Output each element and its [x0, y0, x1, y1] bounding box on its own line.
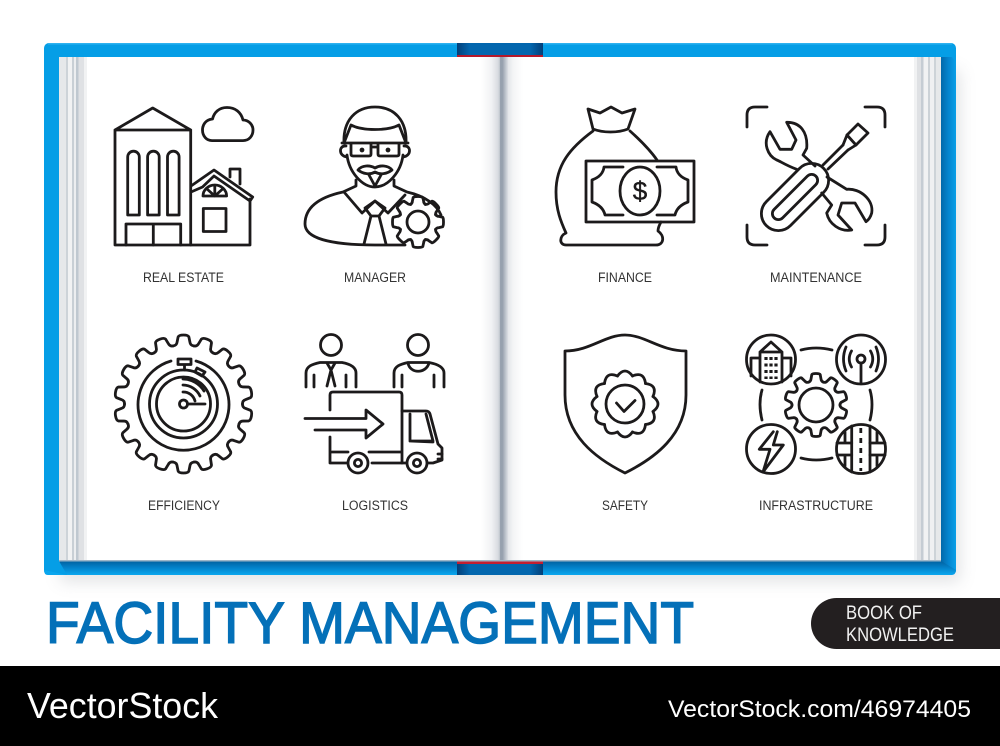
person with tie [306, 334, 356, 387]
dollar sign: $ [633, 176, 648, 206]
stopwatch ring [150, 370, 218, 438]
building circle [746, 335, 796, 384]
icon: efficiency [114, 335, 253, 473]
footer bar [0, 666, 1000, 746]
body [305, 180, 441, 245]
icon: infrastructure [746, 335, 886, 474]
cog outline [114, 335, 253, 473]
banknote [586, 161, 694, 222]
pages [59, 57, 941, 561]
label: safety: SAFETY [602, 498, 648, 513]
antenna circle [836, 335, 886, 384]
wrench lower head [822, 177, 872, 230]
arched window [203, 185, 227, 196]
screwdriver shaft [823, 145, 848, 169]
left page edges [59, 57, 87, 561]
tie [364, 201, 386, 244]
book cover [44, 43, 956, 575]
cloud [202, 108, 253, 141]
gauge arcs [183, 379, 204, 401]
square window [203, 208, 226, 232]
outer ring [138, 361, 229, 450]
icon: maintenance [747, 107, 885, 245]
handle slot [770, 172, 820, 222]
tower windows [128, 151, 179, 215]
ears [340, 146, 410, 157]
right page edges [914, 57, 941, 561]
title: FACILITY MANAGEMENT [46, 591, 694, 656]
chimney [230, 169, 240, 184]
gutter shading [481, 57, 523, 561]
watermark logo text: VectorStock [27, 685, 219, 726]
stopwatch button [195, 368, 205, 376]
truck cab [402, 411, 442, 463]
label: efficiency: EFFICIENCY [148, 498, 220, 513]
badge text: BOOK OF [846, 603, 922, 624]
badge: book of knowledge [811, 598, 1000, 649]
glasses [342, 143, 408, 156]
tower [115, 108, 191, 245]
collar [344, 192, 405, 213]
badge pill [811, 598, 1000, 649]
label: real estate: REAL ESTATE [143, 270, 224, 285]
footer background [0, 666, 1000, 746]
bag knot [588, 107, 635, 132]
spine top with ribbon [457, 43, 543, 57]
icon: logistics [305, 334, 444, 473]
book shadow [60, 70, 960, 582]
gauge dot and hand [180, 400, 188, 408]
screwdriver handle [754, 156, 836, 238]
central gear [784, 374, 848, 436]
label: maintenance: MAINTENANCE [770, 270, 862, 285]
banknote frame [592, 167, 688, 215]
corner brackets [747, 107, 885, 245]
cover right inner band [941, 57, 956, 572]
icon: safety [565, 335, 686, 473]
person with crew neck [394, 334, 444, 387]
hair [344, 107, 406, 143]
watermark url: VectorStock.com/46974405 [668, 696, 971, 723]
icon: manager [305, 107, 444, 248]
screwdriver neck [843, 135, 856, 150]
icon: real estate [115, 108, 253, 245]
label: infrastructure: INFRASTRUCTURE [759, 498, 873, 513]
check mark [616, 400, 635, 412]
cab details [438, 454, 442, 459]
lightning circle [746, 424, 796, 474]
badge [592, 371, 658, 437]
road circle [836, 424, 886, 474]
wheels [348, 453, 368, 473]
goatee [369, 175, 381, 186]
eyes [361, 149, 363, 151]
truck box [330, 392, 402, 463]
face [347, 155, 403, 187]
banknote oval [620, 167, 660, 215]
arrows [305, 410, 383, 438]
open book [44, 43, 956, 575]
cab window [410, 414, 433, 442]
shield [565, 335, 686, 473]
moustache [358, 166, 392, 174]
wrench upper head [766, 122, 815, 169]
label: manager: MANAGER [344, 270, 406, 285]
gear [392, 196, 444, 248]
icon: finance [556, 107, 694, 245]
spine bottom with ribbon [457, 561, 543, 575]
house [191, 170, 253, 245]
connecting arcs [760, 348, 872, 460]
badge: book of knowledge: KNOWLEDGE [846, 625, 954, 646]
tower door [126, 224, 181, 245]
stopwatch crown [178, 359, 191, 370]
cover bottom inner band [59, 561, 950, 575]
label: finance: FINANCE [598, 270, 652, 285]
screwdriver tip [847, 124, 868, 145]
label: logistics: LOGISTICS [342, 498, 408, 513]
bag body [556, 131, 663, 245]
